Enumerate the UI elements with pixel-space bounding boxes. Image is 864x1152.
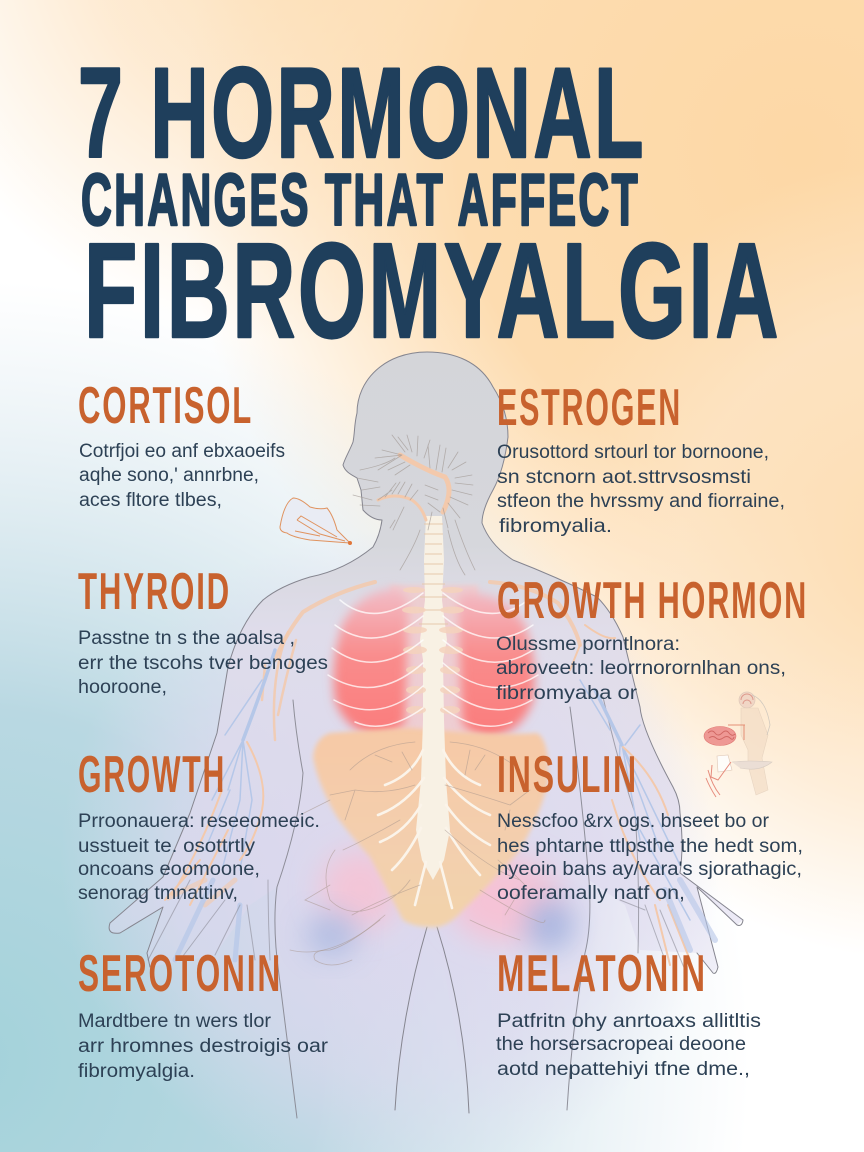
- heading: thyroid: THYROID: [78, 563, 231, 621]
- left arm outline: [109, 600, 263, 967]
- text: melatonin: aotd nepattehiyi tfne dme.,: [497, 1059, 750, 1080]
- text: growth hormone: Olussme porntlnora:: [496, 634, 680, 655]
- text: estrogen: Orusottord srtourl tor bornoone,: [497, 442, 769, 463]
- text: estrogen: sn stcnorn aot.sttrvsosmsti: [497, 467, 751, 488]
- text: serotonin: [78, 1011, 329, 1082]
- neck vertebrae: [419, 524, 448, 624]
- text: growth hormone: [496, 634, 786, 704]
- neck and right shoulder outline: [482, 437, 743, 973]
- panel: growth: [78, 746, 320, 904]
- right inner arm and torso line: [567, 707, 590, 1110]
- icon: small figure with brain: [704, 692, 772, 797]
- heading: serotonin: SEROTONIN: [78, 945, 282, 1003]
- lower rib separators: [378, 750, 490, 908]
- text: thyroid: [78, 628, 328, 698]
- text: cortisol: Cotrfjoi eo anf ebxaoeifs: [79, 441, 285, 462]
- text: insulin: Nesscfoo &rx ogs. bnseet bo or: [497, 811, 770, 832]
- text: growth: [78, 811, 320, 904]
- text: thyroid: Passtne tn s the aoalsa ,: [78, 628, 295, 649]
- text: serotonin: arr hromnes destroigis oar: [78, 1036, 329, 1057]
- lungs: [334, 585, 534, 738]
- text: growth: senorag tmnattinv,: [78, 883, 238, 904]
- heading: estrogen: ESTROGEN: [497, 379, 682, 437]
- text: serotonin: Mardtbere tn wers tlor: [78, 1011, 272, 1032]
- text: growth: usstueit te. osottrtly: [78, 836, 256, 857]
- text: growth: Prroonauera: reseeomeeic.: [78, 811, 320, 832]
- text: estrogen: [497, 442, 785, 537]
- text: cortisol: aces fltore tlbes,: [79, 490, 222, 511]
- ribs over the lungs: [328, 593, 538, 726]
- callout: gland icon: [280, 498, 352, 545]
- panel: melatonin: [496, 945, 761, 1080]
- text: melatonin: the horsersacropeai deoone: [496, 1034, 746, 1055]
- heading: insulin: INSULIN: [497, 746, 638, 804]
- panel: insulin: [497, 746, 803, 904]
- head outline: [263, 352, 508, 600]
- abdomen: [313, 728, 548, 927]
- inner leg lines: [395, 927, 469, 1113]
- text: growth hormone: abroveetn: leorrnorornlhan ons,: [496, 658, 786, 679]
- rib stubs: [402, 587, 464, 714]
- text: insulin: [497, 811, 803, 904]
- shoulder and arm nerves: [148, 582, 715, 970]
- text: melatonin: Patfritn ohy anrtoaxs allitltis: [497, 1011, 761, 1032]
- panel: serotonin: [78, 945, 329, 1082]
- brain nerve cluster: [353, 435, 475, 575]
- left inner arm and torso line: [275, 700, 303, 1118]
- text: growth: oncoans eoomoone,: [78, 859, 260, 880]
- text: cortisol: [79, 441, 285, 511]
- right forearm inner line: [603, 697, 639, 953]
- panel: growth hormone: [496, 572, 808, 704]
- text: serotonin: fibromyalgia.: [78, 1061, 195, 1082]
- panel: cortisol: [78, 377, 285, 511]
- text: thyroid: err the tscohs tver benoges: [78, 653, 328, 674]
- heading: melatonin: MELATONIN: [497, 945, 707, 1003]
- text: insulin: hes phtarne ttlpsthe the hedt som,: [497, 836, 803, 857]
- heading: growth: GROWTH: [78, 746, 226, 804]
- panel: estrogen: [497, 379, 785, 537]
- text: insulin: nyeoin bans ay/vara's sjorathagic,: [497, 859, 802, 880]
- text: estrogen: fibromyalia.: [499, 516, 612, 537]
- text: insulin: ooferamally natf on,: [497, 883, 685, 904]
- text: melatonin: [496, 1011, 761, 1080]
- body silhouette: [109, 352, 743, 1118]
- lower torso colour glow: [306, 850, 574, 957]
- spine: [416, 516, 450, 880]
- heading: cortisol: CORTISOL: [78, 377, 253, 435]
- panel: thyroid: [78, 563, 328, 698]
- abdominal nerve veins: [290, 742, 545, 965]
- text: growth hormone: fibrromyaba or: [496, 683, 638, 704]
- text: cortisol: aqhe sono,' annrbne,: [79, 465, 259, 486]
- human body illustration: [109, 352, 743, 1118]
- title: [78, 42, 781, 366]
- text: estrogen: stfeon the hvrssmy and fiorraine,: [497, 491, 785, 512]
- text: thyroid: hooroone,: [78, 677, 167, 698]
